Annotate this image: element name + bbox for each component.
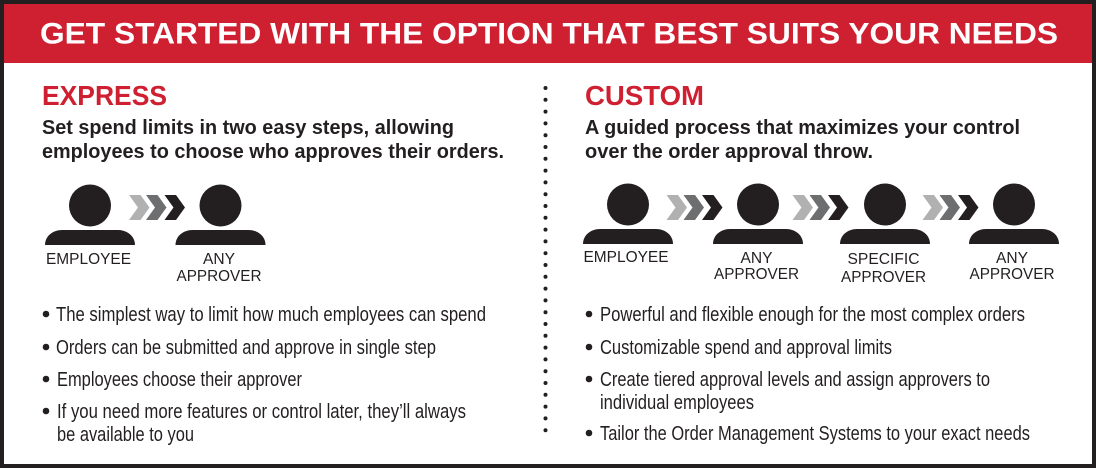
label: any approver: [714, 250, 799, 283]
label: any approver: ANY: [740, 250, 773, 267]
bullet list: express: The simplest way to limit how much employees can spend: [56, 304, 486, 326]
label: any approver: ANY: [203, 251, 235, 268]
icon: employee: [45, 184, 135, 245]
heading: custom: CUSTOM: [585, 80, 704, 111]
title banner: [4, 4, 1092, 63]
icon: specific approver: [840, 184, 930, 244]
subheading: custom: [585, 117, 1020, 163]
subheading: custom: A guided process that maximizes your control: [585, 117, 1020, 139]
bullet list: express: If you need more features or control later, they’ll always: [57, 401, 466, 423]
label: employee: EMPLOYEE: [584, 249, 668, 266]
flow diagram: custom: [583, 184, 1059, 286]
bullet list: express: be available to you: [57, 424, 194, 446]
arrow: [129, 195, 185, 220]
bullet list: custom: individual employees: [600, 392, 754, 414]
arrow: [792, 195, 848, 220]
label: any approver: APPROVER: [176, 268, 262, 285]
heading: express: EXPRESS: [42, 80, 167, 111]
bullet list: express: [43, 304, 486, 446]
subheading: express: Set spend limits in two easy steps, allowing: [42, 117, 454, 139]
arrow: [922, 195, 978, 220]
dotted divider: [544, 88, 548, 442]
panel: custom: [583, 80, 1059, 445]
icon: employee: [583, 184, 673, 244]
panel: express: [42, 80, 504, 446]
label: any approver: [970, 250, 1054, 283]
label: employee: EMPLOYEE: [46, 251, 131, 268]
subheading: custom: over the order approval throw.: [585, 141, 873, 163]
bullet list: express: Employees choose their approver: [57, 369, 302, 391]
subheading: express: [42, 117, 504, 163]
bullet list: express: Orders can be submitted and approve in single step: [56, 337, 436, 359]
label: specific approver: APPROVER: [841, 269, 926, 286]
label: any approver: APPROVER: [714, 266, 799, 283]
arrow: [666, 195, 722, 220]
bullet list: custom: Powerful and flexible enough for the most complex orders: [600, 304, 1025, 326]
label: any approver: APPROVER: [970, 266, 1054, 283]
icon: any approver: [176, 184, 266, 245]
bullet list: custom: Create tiered approval levels and assign approvers to: [600, 369, 990, 391]
label: any approver: [176, 251, 262, 285]
icon: any approver: [713, 184, 803, 244]
label: specific approver: SPECIFIC: [848, 251, 920, 268]
icon: any approver: [969, 184, 1059, 244]
flow diagram: express: [45, 184, 266, 285]
label: any approver: ANY: [996, 250, 1028, 267]
subheading: express: employees to choose who approves their orders.: [42, 141, 504, 163]
title banner: GET STARTED WITH THE OPTION THAT BEST SUITS YOUR NEEDS: [40, 18, 1058, 50]
label: specific approver: [841, 251, 926, 286]
bullet list: custom: [586, 304, 1030, 445]
bullet list: custom: Customizable spend and approval limits: [600, 337, 892, 359]
